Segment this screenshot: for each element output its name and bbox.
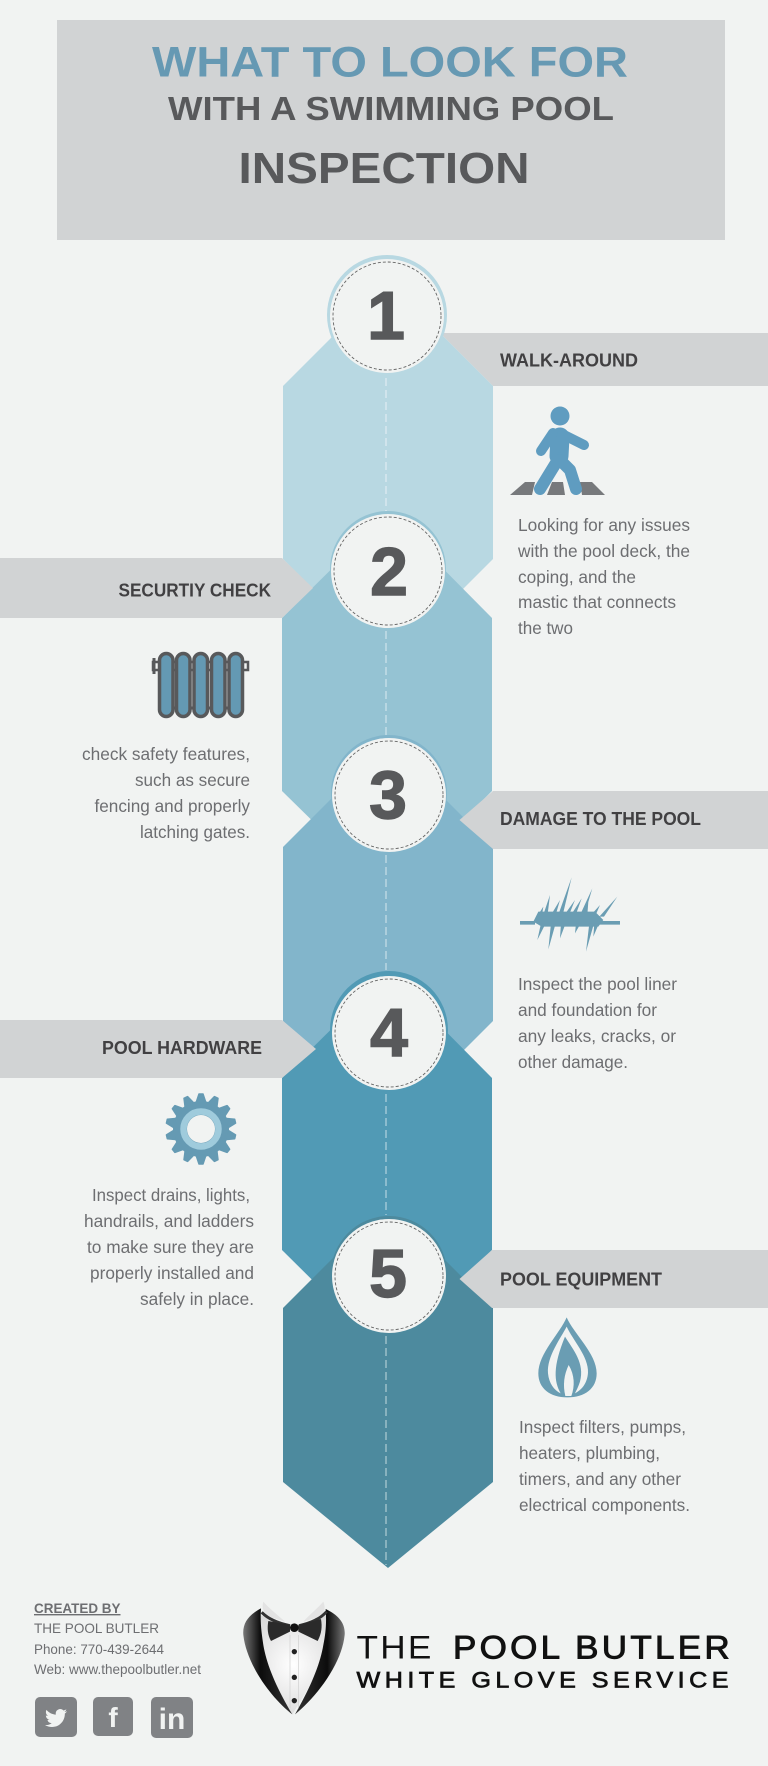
text: damage description [518, 974, 677, 1072]
footer credits: Web: www.thepoolbutler.net [34, 1661, 201, 1677]
title banner: WHAT TO LOOK FOR [152, 38, 628, 86]
label banner: walk-around [440, 333, 768, 386]
title banner [57, 20, 725, 240]
text: equipment description: Inspect filters, pumps, [519, 1417, 686, 1437]
label banner: pool equipment [460, 1250, 768, 1308]
label banner: security check: SECURTIY CHECK [118, 580, 271, 600]
label banner: pool hardware: POOL HARDWARE [102, 1038, 262, 1058]
logo: the pool butler wordmark [356, 1630, 733, 1692]
segment 3 [283, 742, 493, 1126]
footer credits [34, 1600, 201, 1677]
icon: walking person [510, 406, 605, 495]
label banner: damage to the pool: DAMAGE TO THE POOL [500, 809, 701, 829]
text: equipment description: heaters, plumbing, [519, 1443, 660, 1463]
label banner: pool hardware [0, 1020, 316, 1078]
step badge 1: 1 [367, 278, 405, 354]
text: equipment description: timers, and any other [519, 1469, 681, 1489]
text: hardware description: properly installed and [90, 1263, 254, 1283]
text: damage description: and foundation for [518, 1000, 657, 1020]
icon: twitter [35, 1697, 77, 1737]
text: damage description: any leaks, cracks, or [518, 1026, 676, 1046]
logo: the pool butler wordmark: POOL BUTLER [453, 1630, 733, 1666]
icon: linkedin: in [159, 1703, 185, 1736]
text: hardware description: handrails, and ladders [84, 1211, 254, 1231]
text: walk-around description: coping, and the [518, 567, 636, 587]
title banner: WITH A SWIMMING POOL [168, 90, 614, 127]
logo: the pool butler wordmark: THE [356, 1630, 434, 1666]
text: security check description: check safety features, [82, 744, 250, 764]
step badge 2 [330, 511, 446, 628]
text: hardware description: to make sure they are [87, 1237, 254, 1257]
icon: facebook: f [108, 1702, 118, 1733]
icon: facebook [93, 1697, 133, 1736]
text: walk-around description: mastic that connects [518, 592, 676, 612]
segment 2 [282, 513, 492, 895]
step badge 4 [330, 971, 448, 1090]
text: security check description: such as secure [135, 770, 250, 790]
step badge 3: 3 [369, 757, 407, 833]
step badge 2: 2 [370, 534, 408, 610]
text: hardware description: safely in place. [140, 1289, 254, 1309]
footer credits: Phone: 770-439-2644 [34, 1641, 164, 1657]
text: security check description: fencing and properly [94, 796, 250, 816]
text: security check description: latching gates. [140, 822, 250, 842]
text: equipment description [519, 1417, 690, 1515]
text: hardware description [84, 1185, 254, 1309]
title banner: INSPECTION [238, 144, 530, 193]
text: walk-around description: the two [518, 618, 573, 638]
text: walk-around description [517, 515, 690, 638]
logo: tuxedo [243, 1602, 345, 1714]
logo: the pool butler wordmark: WHITE GLOVE SERVICE [356, 1668, 733, 1692]
segment 5 [283, 1224, 493, 1568]
footer credits: THE POOL BUTLER [34, 1620, 159, 1636]
icon: crack waveform [520, 877, 620, 952]
step badge 5 [331, 1216, 447, 1333]
step badge 3 [331, 735, 447, 852]
icon: gear [166, 1094, 236, 1164]
step badge 5: 5 [369, 1236, 407, 1312]
step badge 1 [327, 255, 447, 375]
text: hardware description: Inspect drains, lights, [92, 1185, 250, 1205]
step badge 4: 4 [370, 995, 408, 1071]
text: walk-around description: Looking for any issues [518, 515, 690, 535]
text: walk-around description: with the pool deck, the [517, 541, 690, 561]
label banner: walk-around: WALK-AROUND [500, 350, 638, 370]
text: damage description: other damage. [518, 1052, 628, 1072]
footer credits: CREATED BY [34, 1600, 121, 1616]
label banner: security check [0, 558, 313, 618]
segment 1 [283, 281, 493, 664]
text: security check description [82, 744, 250, 842]
text: damage description: Inspect the pool liner [518, 974, 677, 994]
icon: linkedin [151, 1697, 193, 1738]
label banner: damage to the pool [460, 791, 768, 849]
segment 4 [282, 973, 492, 1355]
icon: flame [538, 1317, 597, 1397]
text: equipment description: electrical components. [519, 1495, 690, 1515]
label banner: pool equipment: POOL EQUIPMENT [500, 1270, 662, 1290]
icon: radiator [152, 654, 248, 716]
centre dashed line [385, 378, 387, 1565]
